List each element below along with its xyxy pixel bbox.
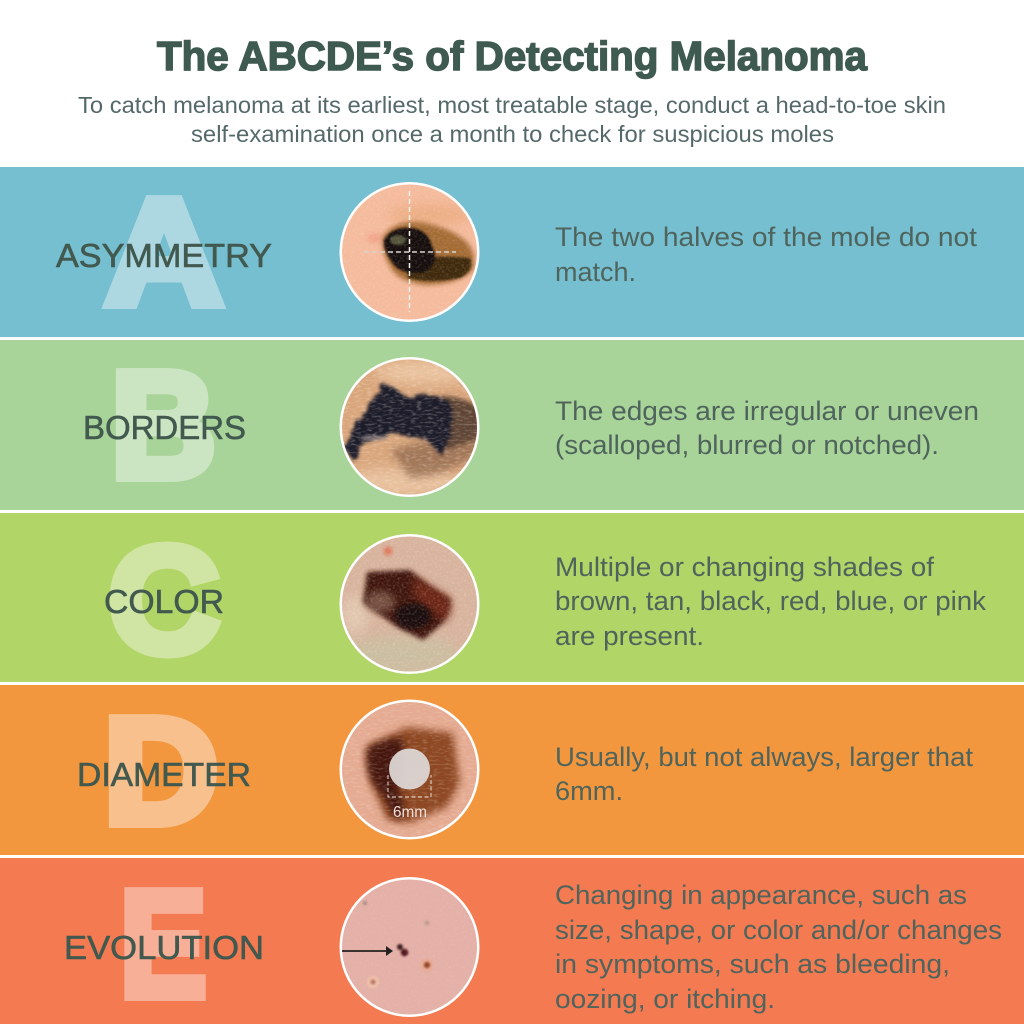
photo: asymmetrical mole <box>340 182 480 322</box>
label: borders: BORDERS <box>83 410 246 447</box>
description: size, shape, or color and/or changes <box>555 915 1002 945</box>
letter D: D <box>104 686 218 855</box>
description: 6mm. <box>555 776 623 806</box>
dashed size bracket <box>388 775 431 797</box>
description <box>555 552 987 651</box>
subtitle: self-examination once a month to check for suspicious moles <box>191 121 834 147</box>
description <box>555 742 973 806</box>
description: brown, tan, black, red, blue, or pink <box>555 586 987 616</box>
panel: asymmetry <box>0 167 1024 337</box>
letter B: B <box>111 340 216 509</box>
letter A: A <box>105 167 223 336</box>
photo: multi-coloured mole <box>340 534 480 675</box>
description: match. <box>555 257 636 287</box>
letter C: C <box>108 515 220 684</box>
6mm label: 6mm <box>393 804 427 821</box>
description: Usually, but not always, larger that <box>555 742 973 772</box>
description <box>555 396 979 460</box>
label: evolution: EVOLUTION <box>64 930 264 967</box>
description <box>555 222 978 287</box>
description: The edges are irregular or uneven <box>555 396 979 426</box>
letter E: E <box>120 859 206 1024</box>
description: are present. <box>555 621 704 651</box>
title: The ABCDE’s of Detecting Melanoma <box>157 33 868 79</box>
arrow <box>342 946 393 956</box>
photo: large mole with 6mm marker <box>340 700 480 840</box>
description: oozing, or itching. <box>555 984 775 1014</box>
description <box>555 880 1002 1014</box>
description: Changing in appearance, such as <box>555 880 967 910</box>
photo: evolving spots <box>340 877 480 1017</box>
description: Multiple or changing shades of <box>555 552 935 582</box>
label: asymmetry: ASYMMETRY <box>56 238 272 275</box>
subtitle <box>78 92 946 147</box>
panel: color <box>0 513 1024 684</box>
subtitle: To catch melanoma at its earliest, most treatable stage, conduct a head-to-toe skin <box>78 92 946 118</box>
photo: irregular border mole <box>340 357 480 497</box>
label: diameter: DIAMETER <box>77 757 251 794</box>
description: (scalloped, blurred or notched). <box>555 430 939 460</box>
6mm circle <box>389 748 430 790</box>
panel: borders <box>0 340 1024 510</box>
panel: evolution <box>0 858 1024 1024</box>
description: in symptoms, such as bleeding, <box>555 949 950 979</box>
panel: diameter <box>0 685 1024 855</box>
description: The two halves of the mole do not <box>555 222 978 252</box>
dashed crosshair <box>364 191 456 312</box>
label: color: COLOR <box>104 584 224 621</box>
